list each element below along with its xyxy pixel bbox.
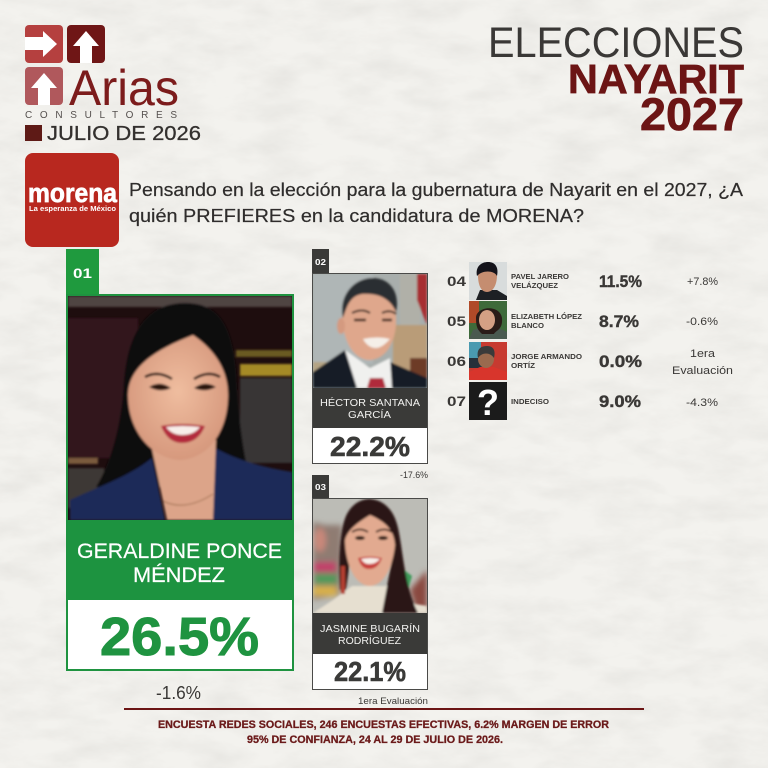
rank 07: 07 bbox=[447, 393, 466, 409]
portrait: Geraldine Ponce bbox=[68, 296, 292, 520]
panel: candidate 02 bbox=[312, 249, 428, 480]
icon: up arrow tile light bbox=[25, 67, 63, 105]
name band: GERALDINE PONCE bbox=[77, 540, 282, 563]
morena logo: morena bbox=[28, 178, 118, 208]
row: candidate 05 bbox=[447, 301, 718, 339]
change: Evaluación bbox=[672, 365, 733, 377]
rank tab 03 bbox=[312, 475, 329, 499]
rank tab 03: 03 bbox=[315, 483, 327, 492]
title: 2027 bbox=[640, 89, 744, 140]
rank 05: 05 bbox=[447, 313, 466, 329]
name band bbox=[313, 388, 427, 428]
icon: up arrow tile dark bbox=[67, 25, 105, 63]
change -17.6%: -17.6% bbox=[400, 470, 428, 480]
percentage: 0.0% bbox=[599, 352, 642, 371]
name: INDECISO bbox=[511, 397, 549, 406]
panel frame bbox=[312, 274, 428, 464]
name band: MÉNDEZ bbox=[133, 564, 225, 587]
rank tab 02 bbox=[312, 249, 329, 274]
title: NAYARIT bbox=[568, 56, 744, 102]
row: candidate 04 bbox=[447, 262, 718, 300]
name: PAVEL JARERO bbox=[511, 272, 569, 281]
icon: question mark bbox=[469, 382, 507, 423]
morena logo: La esperanza de México bbox=[29, 206, 116, 213]
rank 06: 06 bbox=[447, 353, 466, 369]
name band: RODRÍGUEZ bbox=[338, 634, 401, 647]
panel frame bbox=[312, 498, 428, 690]
icon: question mark: ? bbox=[477, 382, 499, 423]
row: candidate 06 bbox=[447, 342, 733, 380]
logo: Arias Consultores bbox=[25, 25, 179, 121]
name bbox=[511, 312, 582, 330]
portrait: Héctor Santana bbox=[313, 274, 427, 388]
rank tab 02: 02 bbox=[315, 258, 327, 267]
rank tab 01: 01 bbox=[73, 265, 92, 281]
logo subtitle: CONSULTORES bbox=[25, 110, 177, 121]
percentage: 8.7% bbox=[599, 312, 639, 331]
name bbox=[511, 352, 582, 370]
question bbox=[129, 180, 743, 226]
footer methodology note: 95% DE CONFIANZA, 24 AL 29 DE JULIO DE 2026. bbox=[247, 734, 503, 746]
percentage 22.2%: 22.2% bbox=[330, 431, 410, 462]
question: Pensando en la elección para la gubernatura de Nayarit en el 2027, ¿A bbox=[129, 180, 743, 200]
change: -4.3% bbox=[686, 397, 718, 409]
percentage 26.5%: 26.5% bbox=[100, 607, 259, 667]
date marker square bbox=[25, 125, 42, 141]
change: 1era bbox=[690, 348, 716, 360]
change: -0.6% bbox=[686, 316, 718, 328]
date: JULIO DE 2026 bbox=[47, 123, 201, 145]
name band bbox=[313, 613, 427, 654]
name band: GARCÍA bbox=[348, 408, 391, 421]
percentage: 9.0% bbox=[599, 392, 641, 411]
portrait: Elizabeth López bbox=[469, 301, 507, 339]
icon: right arrow tile bbox=[25, 25, 63, 63]
change bbox=[672, 348, 733, 377]
portrait: Pavel Jarero bbox=[469, 262, 507, 300]
change -1.6%: -1.6% bbox=[156, 683, 201, 703]
change: 1era Evaluación: 1era Evaluación bbox=[358, 696, 428, 707]
name band bbox=[66, 520, 294, 600]
name band: JASMINE BUGARÍN bbox=[320, 622, 420, 635]
change: +7.8% bbox=[687, 276, 718, 288]
portrait: Jasmine Bugarín bbox=[313, 499, 427, 613]
name: ORTÍZ bbox=[511, 361, 535, 370]
morena logo bbox=[25, 153, 119, 247]
name: BLANCO bbox=[511, 321, 544, 330]
panel: candidate 01 bbox=[66, 249, 294, 703]
name: ELIZABETH LÓPEZ bbox=[511, 312, 582, 321]
row: undecided 07 bbox=[447, 382, 718, 423]
percentage: 11.5% bbox=[599, 272, 642, 291]
logo wordmark: Arias bbox=[69, 60, 179, 116]
name bbox=[511, 272, 569, 290]
panel frame bbox=[67, 295, 293, 670]
portrait: Jorge Armando bbox=[469, 342, 507, 380]
panel: candidate 03 bbox=[312, 475, 428, 707]
name band: HÉCTOR SANTANA bbox=[320, 396, 420, 409]
name: JORGE ARMANDO bbox=[511, 352, 582, 361]
title bbox=[488, 19, 744, 140]
percentage 22.1%: 22.1% bbox=[334, 656, 406, 687]
footer methodology note: ENCUESTA REDES SOCIALES, 246 ENCUESTAS EFECTIVAS, 6.2% MARGEN DE ERROR bbox=[158, 719, 609, 731]
footer methodology note bbox=[158, 719, 609, 746]
rank tab 01 bbox=[66, 249, 99, 295]
name: VELÁZQUEZ bbox=[511, 281, 558, 290]
rank 04: 04 bbox=[447, 273, 466, 289]
question: quién PREFIERES en la candidatura de MORENA? bbox=[129, 206, 584, 226]
title: ELECCIONES bbox=[488, 19, 744, 67]
